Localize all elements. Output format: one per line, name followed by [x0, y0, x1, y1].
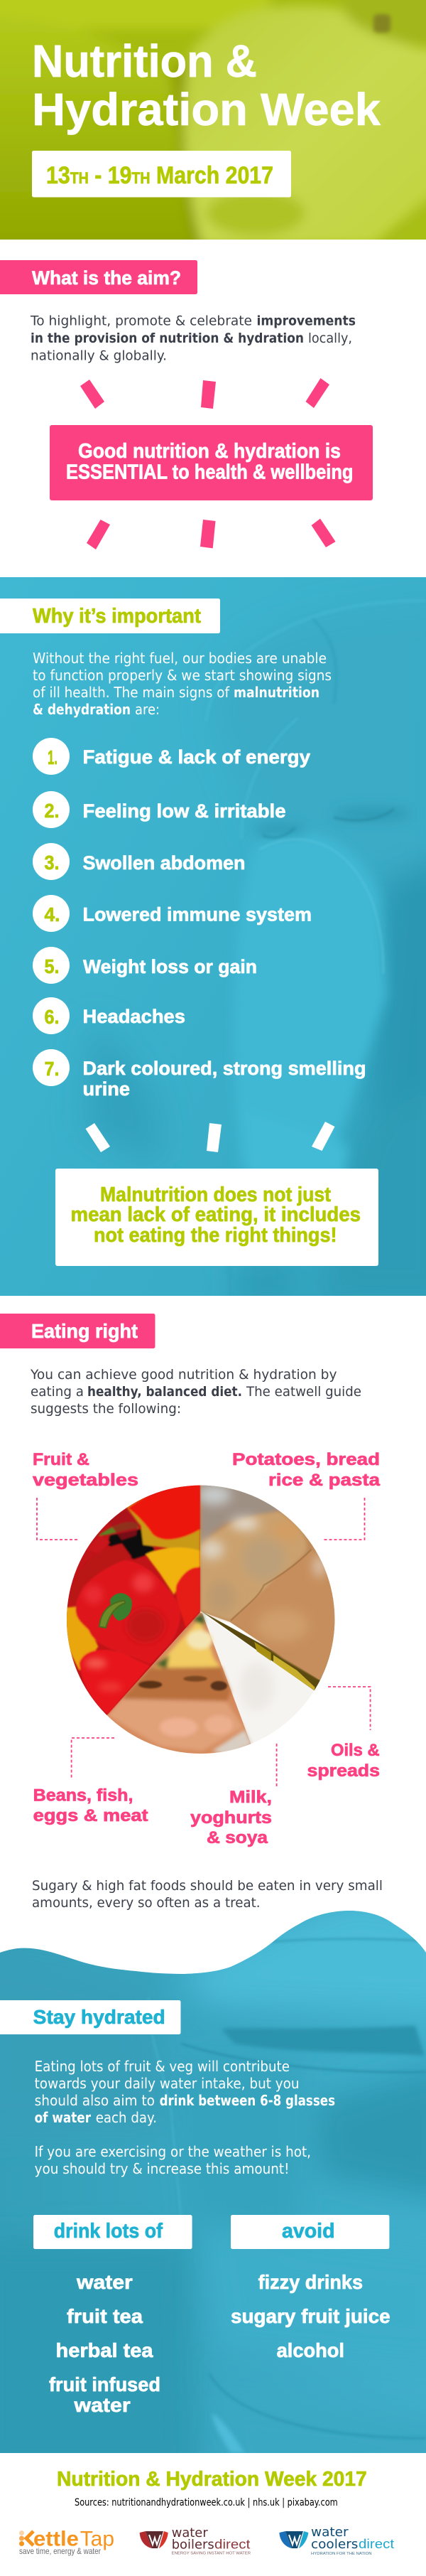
text: aim paragraph — [30, 313, 356, 364]
text: hydration paragraph: each day. — [96, 2109, 157, 2126]
callout: malnutrition: mean lack of eating, it includes — [71, 1203, 361, 1226]
list item 7: 7. — [44, 1058, 60, 1080]
slice: oils — [202, 1612, 322, 1690]
text: why paragraph: to function properly & we start showing signs — [33, 667, 332, 684]
logo: KettleTap: Tap — [80, 2528, 114, 2550]
text: eating paragraph: You can achieve good nutrition & hydration by — [30, 1367, 337, 1383]
label: oils and spreads — [307, 1687, 380, 1781]
slice: dairy — [204, 1616, 314, 1744]
slice: bread — [200, 1486, 335, 1680]
icon: white burst ticks — [85, 1122, 335, 1152]
text: hydration paragraph: should also aim to — [35, 2092, 155, 2109]
logo: water coolers direct: direct — [359, 2537, 394, 2551]
list item 5: 5. — [44, 955, 60, 977]
label: oils and spreads: spreads — [307, 1761, 380, 1781]
list item 4: 4. — [44, 903, 60, 925]
heading: stay hydrated: Stay hydrated — [33, 2006, 165, 2028]
logo: water boilers direct — [140, 2526, 251, 2556]
column: drink lots of: drink lots of — [54, 2220, 163, 2243]
text: why paragraph: malnutrition — [234, 684, 320, 701]
text: why paragraph: of ill health. The main signs of — [33, 684, 230, 701]
text: hydration paragraph: If you are exercising or the weather is hot, — [35, 2143, 311, 2160]
panel: eating right — [0, 1314, 383, 1911]
text: hydration paragraph: towards your daily water intake, but you — [35, 2075, 300, 2092]
sources: Sources: nutritionandhydrationweek.co.uk | nhs.uk | pixabay.com — [75, 2497, 338, 2508]
text: why paragraph: are: — [135, 701, 160, 718]
list item 1: 1. — [48, 746, 58, 768]
text: hydration paragraph: Eating lots of fruit & veg will contribute — [35, 2058, 290, 2075]
date badge — [32, 151, 291, 198]
text: sugary foods note — [32, 1878, 383, 1911]
title: Hydration Week — [32, 84, 381, 135]
heading: eating right — [0, 1314, 155, 1348]
label: potatoes, bread, rice and pasta: rice & pasta — [268, 1471, 381, 1490]
column: drink lots of: water — [73, 2394, 131, 2416]
text: eating paragraph: The eatwell guide — [246, 1384, 361, 1400]
text: why paragraph: Without the right fuel, our bodies are unable — [33, 650, 327, 667]
list item 6: Headaches — [82, 1006, 185, 1027]
heading: why it's important: Why it’s important — [33, 605, 201, 628]
logo: water coolers direct: water — [311, 2525, 349, 2540]
label: fruit and vegetables: vegetables — [33, 1471, 138, 1490]
footer — [19, 2468, 394, 2556]
callout: essential: ESSENTIAL to health & wellbeing — [66, 461, 354, 483]
callout: malnutrition: Malnutrition does not just — [100, 1184, 331, 1206]
slice: beans, fish, eggs, meat — [106, 1611, 253, 1754]
list item 6: 6. — [44, 1006, 60, 1028]
column: drink lots of: fruit tea — [67, 2305, 143, 2327]
column: avoid: avoid — [282, 2220, 335, 2243]
callout: essential: Good nutrition & hydration is — [78, 440, 341, 463]
list item 3: 3. — [44, 852, 60, 874]
text: sugary foods note: amounts, every so often as a treat. — [32, 1895, 261, 1911]
slice: fruit and vegetables — [67, 1486, 202, 1715]
callout: malnutrition — [55, 1169, 378, 1266]
list item 4 — [33, 895, 312, 932]
heading: what is the aim — [0, 260, 197, 294]
title — [32, 36, 381, 135]
list item 3: Swollen abdomen — [82, 852, 246, 874]
text: why paragraph: & dehydration — [33, 701, 131, 718]
text: aim paragraph: locally, — [308, 331, 352, 346]
text: eating paragraph: healthy, balanced diet. — [87, 1384, 242, 1400]
panel: why it's important — [0, 577, 426, 1308]
column: drink lots of — [33, 2215, 192, 2416]
label: beans, fish, eggs and meat: eggs & meat — [33, 1806, 148, 1825]
text: hydration paragraph: you should try & increase this amount! — [35, 2160, 289, 2177]
list item 6 — [33, 997, 185, 1034]
text: hydration paragraph: of water — [35, 2109, 91, 2126]
label: beans, fish, eggs and meat: Beans, fish, — [33, 1786, 133, 1805]
text: aim paragraph: in the provision of nutrition & hydration — [31, 331, 304, 346]
list item 1 — [33, 738, 310, 775]
callout: essential — [50, 425, 373, 500]
label: milk, yoghurts and soya: Milk, — [229, 1788, 272, 1807]
list item 7: Dark coloured, strong smelling — [82, 1058, 366, 1079]
photo: woman blowing nose, blue duotone — [0, 577, 426, 1308]
list item 5: Weight loss or gain — [83, 956, 257, 977]
text: sugary foods note: Sugary & high fat foods should be eaten in very small — [32, 1878, 383, 1894]
label: potatoes, bread, rice and pasta: Potatoes, bread — [232, 1450, 380, 1469]
column: drink lots of: herbal tea — [55, 2339, 153, 2361]
column: avoid: alcohol — [277, 2339, 344, 2361]
chart: eatwell food pie — [67, 1486, 335, 1754]
callout: malnutrition: not eating the right things! — [94, 1224, 337, 1247]
label: fruit and vegetables: Fruit & — [33, 1450, 89, 1469]
list item 2: Feeling low & irritable — [82, 800, 285, 822]
logo: KettleTap — [19, 2528, 114, 2556]
column: avoid: fizzy drinks — [258, 2271, 363, 2293]
heading: eating right: Eating right — [31, 1320, 138, 1342]
text: hydration paragraph: drink between 6-8 glasses — [160, 2092, 335, 2109]
label: fruit and vegetables — [33, 1450, 138, 1540]
list item 2 — [33, 791, 285, 828]
column: avoid: sugary fruit juice — [231, 2305, 390, 2327]
panel: stay hydrated — [0, 1898, 426, 2481]
list item 4: Lowered immune system — [82, 904, 312, 925]
footer title: Nutrition & Hydration Week 2017 — [57, 2468, 367, 2491]
column: drink lots of: water — [76, 2271, 133, 2293]
heading: what is the aim: What is the aim? — [32, 267, 181, 289]
logo: water coolers direct: HYDRATION FOR THE NATION — [311, 2552, 372, 2556]
text: eating paragraph: suggests the following: — [31, 1401, 181, 1417]
icon: pink burst ticks above — [80, 378, 329, 409]
column: drink lots of: fruit infused — [49, 2373, 160, 2395]
label: milk, yoghurts and soya — [190, 1744, 277, 1847]
text: eating paragraph — [30, 1367, 361, 1417]
heading: stay hydrated — [0, 2000, 180, 2034]
label: beans, fish, eggs and meat — [33, 1738, 148, 1825]
logo: water boilers direct: boilers — [172, 2538, 214, 2553]
text: aim paragraph: improvements — [257, 313, 356, 328]
text: why paragraph — [33, 650, 332, 718]
text: aim paragraph: To highlight, promote & celebrate — [30, 313, 252, 328]
panel: header — [0, 0, 426, 256]
photo: glass of water, blue duotone with wave top — [0, 1898, 426, 2481]
logo: KettleTap: ettle — [33, 2528, 79, 2550]
list item 2: 2. — [44, 800, 60, 822]
icon: pink burst ticks below — [87, 519, 336, 549]
panel: what is the aim — [0, 260, 373, 549]
title: Nutrition & — [32, 36, 257, 87]
logo: KettleTap: save time, energy & water — [19, 2546, 101, 2556]
list item 7 — [33, 1049, 366, 1100]
heading: why it's important — [0, 599, 220, 633]
label: milk, yoghurts and soya: & soya — [207, 1828, 268, 1847]
list item 7: urine — [82, 1078, 130, 1100]
list item 5 — [33, 947, 257, 984]
label: milk, yoghurts and soya: yoghurts — [190, 1808, 272, 1828]
list item 3 — [33, 843, 246, 880]
logo: water coolers direct: coolers — [311, 2537, 358, 2552]
logo: water boilers direct: water — [172, 2526, 208, 2540]
logo: water boilers direct: ENERGY SAVING INSTANT HOT WATER — [172, 2552, 251, 2556]
logo: water boilers direct: direct — [214, 2538, 250, 2552]
text: hydration paragraph — [35, 2058, 335, 2177]
logo: water coolers direct — [279, 2525, 394, 2556]
label: potatoes, bread, rice and pasta — [232, 1450, 381, 1540]
text: eating paragraph: eating a — [31, 1384, 84, 1400]
text: aim paragraph: nationally & globally. — [31, 348, 167, 364]
list item 1: Fatigue & lack of energy — [82, 746, 310, 768]
column: avoid — [231, 2215, 390, 2361]
date badge: 13TH - 19TH March 2017 — [46, 162, 273, 189]
label: oils and spreads: Oils & — [331, 1741, 380, 1760]
photo: green apples — [0, 0, 426, 256]
